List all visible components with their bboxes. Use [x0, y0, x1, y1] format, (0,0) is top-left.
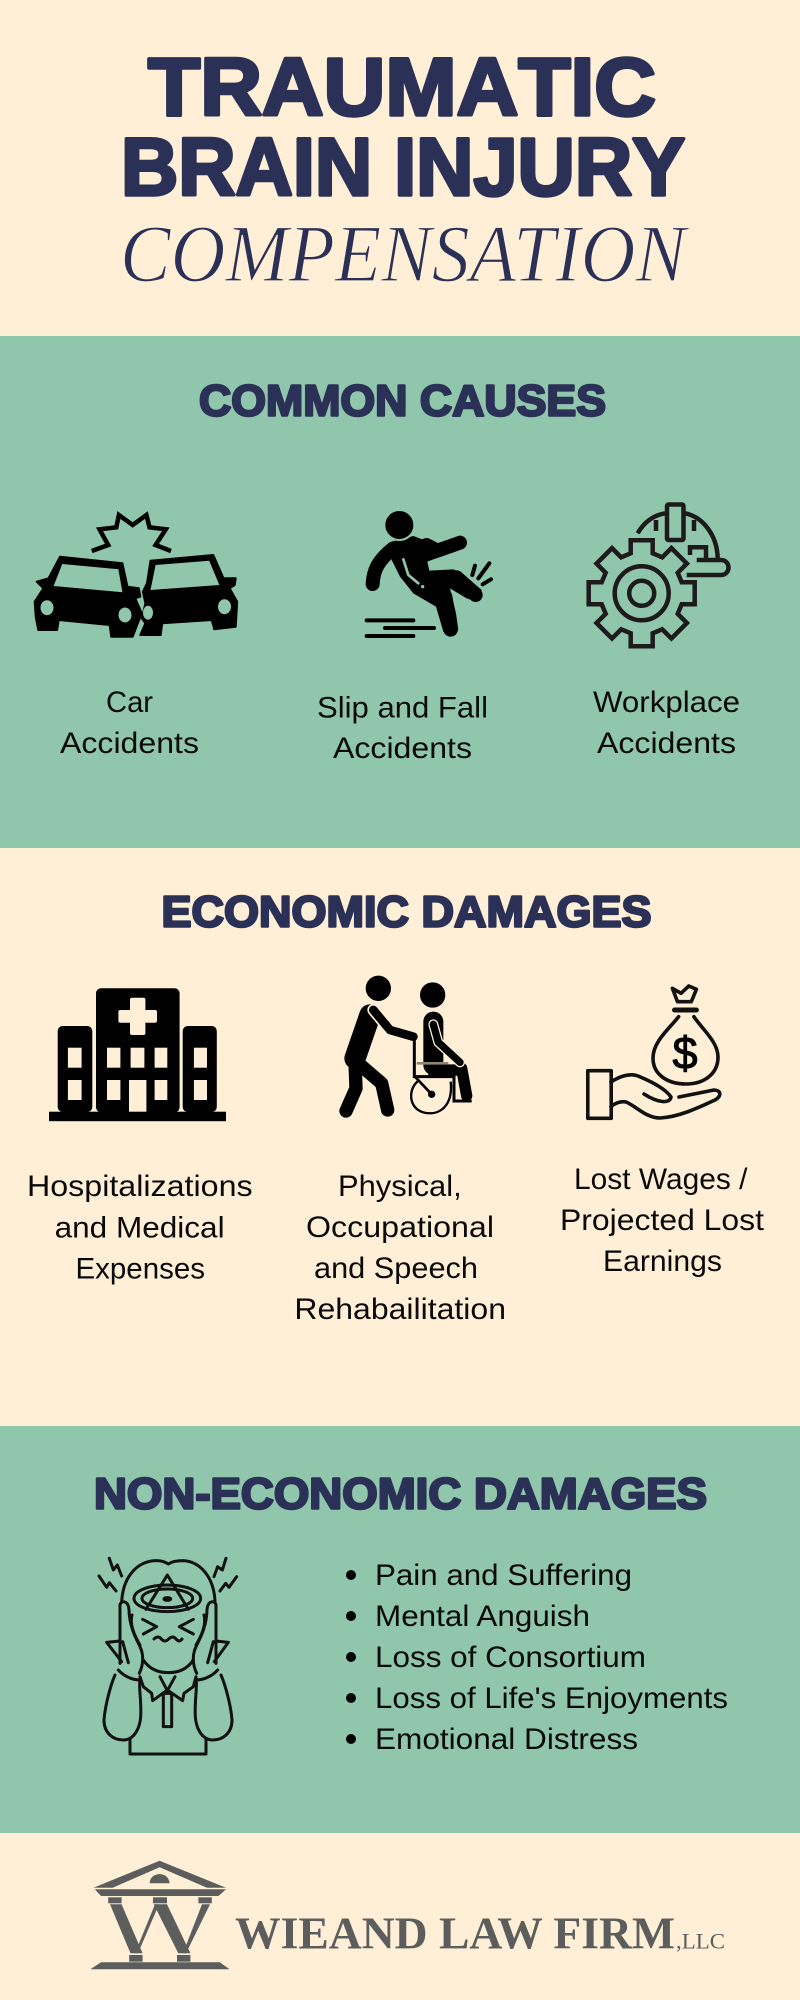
label: rehabilitation	[294, 1170, 506, 1326]
label: lost wages	[560, 1163, 765, 1278]
label: rehabilitation: Physical,	[338, 1170, 462, 1203]
title: traumatic brain injury: BRAIN INJURY	[121, 122, 685, 213]
label: car accidents: Accidents	[60, 727, 199, 760]
title: traumatic brain injury: TRAUMATIC	[148, 42, 656, 133]
panel: non-economic damages	[0, 1426, 800, 1833]
icon: hand holding money bag	[588, 986, 720, 1118]
title: traumatic brain injury	[121, 42, 685, 213]
label: rehabilitation: Occupational	[306, 1211, 494, 1244]
panel: economic damages	[0, 848, 800, 1426]
label: slip and fall accidents	[317, 692, 488, 765]
list: non-economic damages: Loss of Life's Enjoyments	[375, 1682, 728, 1715]
label: lost wages: Lost Wages /	[574, 1163, 748, 1196]
icon: hand holding money bag: $	[672, 1028, 698, 1078]
icon: gear and hard hat	[589, 504, 728, 646]
list: non-economic damages	[346, 1559, 728, 1756]
label: slip and fall accidents: Slip and Fall	[317, 692, 488, 724]
logo: firm name: ,LLC	[676, 1928, 725, 1953]
subtitle: compensation: COMPENSATION	[120, 208, 690, 299]
icon: hospital	[49, 988, 226, 1121]
panel: title header	[0, 0, 800, 336]
panel: common causes	[0, 336, 800, 848]
label: hospitalizations and medical expenses	[27, 1170, 253, 1285]
logo: temple W emblem	[90, 1861, 230, 1969]
label: hospitalizations and medical expenses: and Medical	[55, 1211, 225, 1244]
logo: firm name: WIEAND LAW FIRM	[235, 1908, 675, 1958]
label: rehabilitation: Rehabailitation	[294, 1293, 506, 1326]
label: workplace accidents: Accidents	[597, 727, 736, 760]
label: slip and fall accidents: Accidents	[333, 732, 472, 765]
panel: footer	[0, 1833, 800, 2000]
list: non-economic damages: Loss of Consortium	[375, 1641, 646, 1674]
list: non-economic damages: Emotional Distress	[375, 1723, 638, 1756]
label: car accidents: Car	[106, 686, 153, 719]
icon: person with headache	[99, 1558, 237, 1754]
label: hospitalizations and medical expenses: Hospitalizations	[27, 1170, 253, 1203]
label: car accidents	[60, 686, 199, 760]
label: workplace accidents: Workplace	[593, 686, 740, 719]
icon: slip and fall	[367, 510, 491, 637]
heading: economic damages: ECONOMIC DAMAGES	[162, 888, 652, 936]
label: hospitalizations and medical expenses: Expenses	[76, 1252, 205, 1285]
icon: person pushing wheelchair	[346, 976, 472, 1113]
heading: common causes: COMMON CAUSES	[199, 376, 606, 426]
label: lost wages: Projected Lost	[560, 1204, 765, 1237]
icon: car accident	[35, 515, 237, 637]
label: rehabilitation: and Speech	[314, 1252, 478, 1285]
label: workplace accidents	[593, 686, 740, 760]
list: non-economic damages: Pain and Suffering	[375, 1559, 632, 1592]
heading: non-economic damages: NON-ECONOMIC DAMAGES	[94, 1470, 707, 1518]
list: non-economic damages: Mental Anguish	[375, 1600, 590, 1633]
label: lost wages: Earnings	[603, 1245, 722, 1278]
